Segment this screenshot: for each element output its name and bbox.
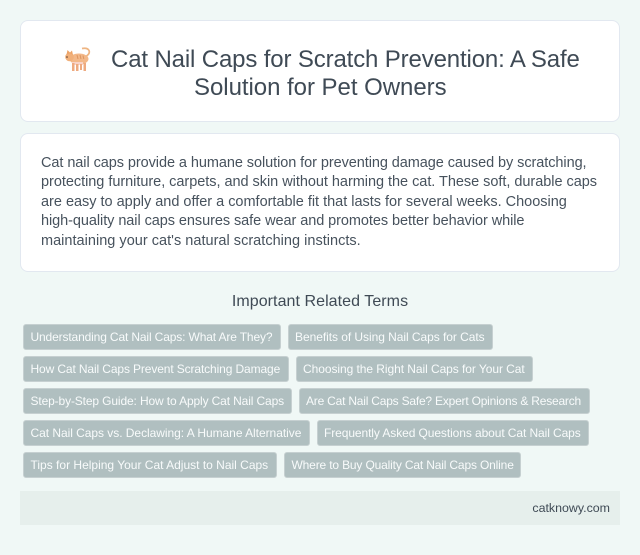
tag: Are Cat Nail Caps Safe? Expert Opinions & Research	[306, 394, 581, 408]
tag	[288, 324, 492, 350]
tag: Where to Buy Quality Cat Nail Caps Online	[292, 458, 514, 472]
tag	[23, 420, 310, 446]
tag: Frequently Asked Questions about Cat Nail Caps	[324, 426, 581, 440]
title line 2: Solution for Pet Owners	[194, 74, 447, 101]
tag	[23, 452, 277, 478]
description text	[41, 155, 597, 249]
tag	[296, 356, 532, 382]
tag: Cat Nail Caps vs. Declawing: A Humane Alternative	[30, 426, 301, 440]
tag	[23, 324, 281, 350]
description text: protecting furniture, carpets, and skin without harming the cat. These soft, durable caps	[41, 174, 597, 190]
tag	[23, 388, 292, 414]
panel: description	[20, 133, 620, 272]
tag	[298, 388, 590, 414]
footer source: catknowy.com	[532, 501, 610, 515]
description text: high-quality nail caps ensures safe wear and promotes better behavior while	[41, 213, 524, 229]
title line 1: Cat Nail Caps for Scratch Prevention: A Safe	[111, 46, 580, 73]
footer bar	[20, 491, 620, 525]
heading: related terms: Important Related Terms	[232, 293, 408, 310]
description text: maintaining your cat's natural scratching instincts.	[41, 233, 361, 249]
tag	[284, 452, 521, 478]
panel: title card	[20, 20, 620, 122]
tag	[316, 420, 588, 446]
description text: are easy to apply and offer a comfortable fit that lasts for several weeks. Choosing	[41, 194, 567, 210]
tag: Understanding Cat Nail Caps: What Are They?	[30, 330, 272, 344]
tag: Tips for Helping Your Cat Adjust to Nail Caps	[30, 458, 268, 472]
tag: Benefits of Using Nail Caps for Cats	[295, 330, 485, 344]
tag group	[23, 324, 590, 478]
tag: How Cat Nail Caps Prevent Scratching Damage	[30, 362, 280, 376]
tag: Choosing the Right Nail Caps for Your Cat	[303, 362, 525, 376]
icon: cat	[65, 47, 90, 71]
tag	[23, 356, 289, 382]
description text: Cat nail caps provide a humane solution for preventing damage caused by scratching,	[41, 155, 587, 171]
tag: Step-by-Step Guide: How to Apply Cat Nail Caps	[30, 394, 284, 408]
